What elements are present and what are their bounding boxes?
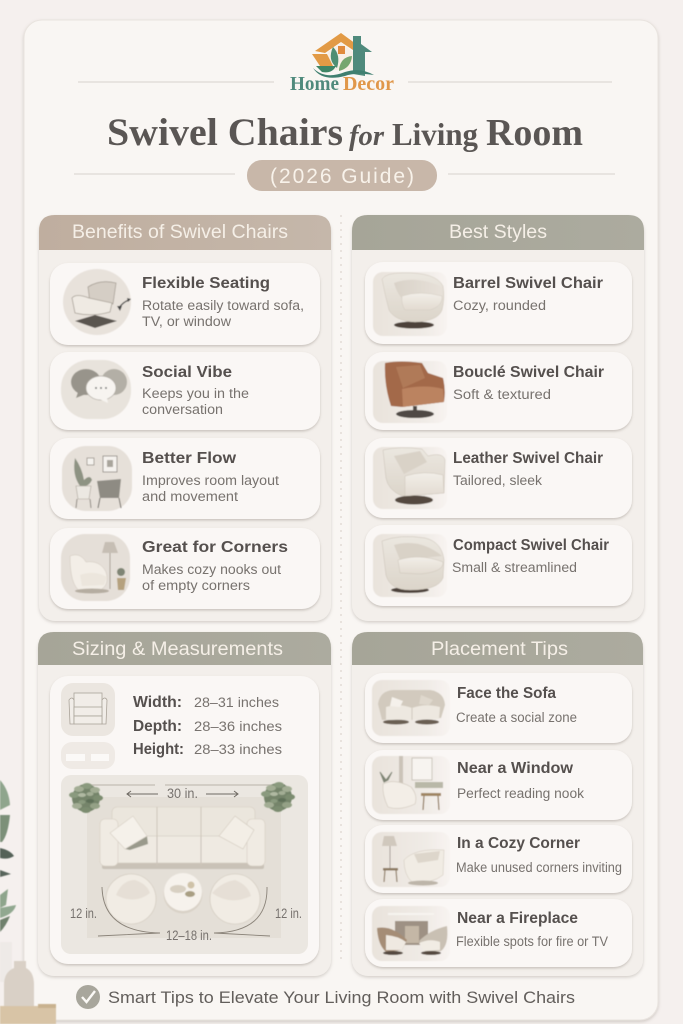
clearance measures: 12 in. <box>275 906 302 921</box>
text: Compact Swivel Chair <box>453 537 609 554</box>
card: fireplace: Flexible spots for fire or TV <box>456 934 608 949</box>
card: flexible seating: Rotate easily toward sofa, <box>142 298 304 313</box>
card: flexible seating <box>50 263 320 345</box>
title: Swivel Chairs <box>107 111 343 154</box>
card: barrel chair: Cozy, rounded <box>453 298 546 313</box>
logo <box>290 33 394 95</box>
card: compact chair <box>365 525 632 606</box>
card: boucle chair <box>365 352 632 430</box>
text: Bouclé Swivel Chair <box>453 364 604 381</box>
chair left <box>106 874 156 924</box>
footer tip <box>76 985 575 1009</box>
icon: chair with rotate arrow <box>63 269 131 335</box>
header: placement: Placement Tips <box>431 639 568 660</box>
icon: house and leaves <box>312 33 374 78</box>
card: boucle chair: Soft & textured <box>453 387 551 402</box>
text: Social Vibe <box>142 364 232 381</box>
card: great for corners: Makes cozy nooks out <box>142 562 281 577</box>
card: barrel chair <box>365 262 632 344</box>
clearance measures: 12–18 in. <box>166 928 212 943</box>
measurements list: 28–31 inches <box>194 695 279 710</box>
card: flexible seating: TV, or window <box>142 314 231 329</box>
title <box>107 111 583 154</box>
icon: speech bubbles <box>61 360 131 419</box>
chair right <box>210 874 260 924</box>
decor: potted plant leaves <box>0 780 16 932</box>
sofa <box>100 807 265 869</box>
top measure: 30 in. <box>167 786 198 801</box>
card: cozy corner <box>365 825 632 893</box>
card: social vibe: Keeps you in the <box>142 386 249 401</box>
card: better flow: Improves room layout <box>142 473 279 488</box>
card: great for corners: of empty corners <box>142 578 250 593</box>
image: barrel chair <box>373 272 447 336</box>
measurements list: Depth: <box>133 718 182 735</box>
header: best styles: Best Styles <box>449 222 547 243</box>
wordmark <box>290 73 394 95</box>
text: Flexible Seating <box>142 275 270 292</box>
coffee table <box>164 873 202 914</box>
card: great for corners <box>50 528 320 609</box>
measurements list: Width: <box>133 694 182 711</box>
card: better flow: and movement <box>142 489 238 504</box>
center dotted divider <box>340 215 342 960</box>
title: Living <box>392 116 478 152</box>
panel: sizing <box>38 632 331 976</box>
icon: chair outline <box>61 683 115 736</box>
top measure <box>85 785 285 801</box>
header: sizing <box>38 632 331 665</box>
text: Near a Window <box>457 760 574 777</box>
text: Leather Swivel Chair <box>453 450 603 467</box>
panel: placement tips <box>352 632 643 976</box>
image: brown swivel chair <box>373 361 447 423</box>
text: Better Flow <box>142 450 237 467</box>
image: two chairs as sofa <box>372 680 450 736</box>
card: better flow <box>50 438 320 519</box>
card: leather chair <box>365 438 632 518</box>
header: benefits: Benefits of Swivel Chairs <box>72 222 288 243</box>
icon: side profile tile <box>61 742 115 769</box>
card: near a window: Perfect reading nook <box>457 786 584 801</box>
card: face the sofa: Create a social zone <box>456 710 577 725</box>
image: corner chair and lamp <box>372 832 450 887</box>
card: near a window <box>365 750 632 820</box>
wordmark: Decor <box>343 73 394 95</box>
image: compact chair <box>373 534 447 597</box>
clearance measures <box>70 887 302 943</box>
wordmark: Home <box>290 73 339 95</box>
text: Great for Corners <box>142 539 288 556</box>
plant right <box>261 782 295 812</box>
image: chair by window <box>372 756 450 814</box>
image: chairs by fireplace <box>372 906 450 961</box>
image: tailored chair <box>373 447 447 509</box>
panel: benefits <box>39 215 331 621</box>
header: placement <box>352 632 643 665</box>
icon: check mark <box>76 985 100 1009</box>
card: measurements <box>50 676 319 964</box>
title: Room <box>486 112 583 154</box>
diagram: sofa layout <box>61 775 308 954</box>
card: face the sofa <box>365 673 632 743</box>
text: Near a Fireplace <box>457 910 578 927</box>
measurements list: 28–36 inches <box>194 719 282 734</box>
plant left <box>69 783 103 813</box>
card: social vibe <box>50 352 320 430</box>
header: sizing: Sizing & Measurements <box>72 639 283 660</box>
text: In a Cozy Corner <box>457 835 580 852</box>
text: Barrel Swivel Chair <box>453 275 603 292</box>
clearance measures: 12 in. <box>70 906 97 921</box>
card: fireplace <box>365 899 632 967</box>
subtitle pill: (2026 Guide) <box>270 165 414 188</box>
subtitle pill <box>247 160 437 191</box>
card: compact chair: Small & streamlined <box>452 560 577 575</box>
text: Face the Sofa <box>457 685 556 702</box>
header: benefits <box>39 215 331 250</box>
measurements list: Height: <box>133 741 184 758</box>
title: for <box>349 121 385 152</box>
measurements list: 28–33 inches <box>194 742 282 757</box>
footer text: Smart Tips to Elevate Your Living Room with Swivel Chairs <box>108 988 575 1007</box>
icon: plant, frames and chair <box>62 446 132 511</box>
decor: vases and wooden tray <box>0 942 56 1024</box>
card: social vibe: conversation <box>142 402 223 417</box>
card: cozy corner: Make unused corners inviting <box>456 860 622 875</box>
measurements list <box>133 694 282 758</box>
header: best styles <box>352 215 644 250</box>
card: leather chair: Tailored, sleek <box>453 473 542 488</box>
panel: best styles <box>352 215 644 621</box>
icon: chair with floor lamp <box>61 534 130 601</box>
